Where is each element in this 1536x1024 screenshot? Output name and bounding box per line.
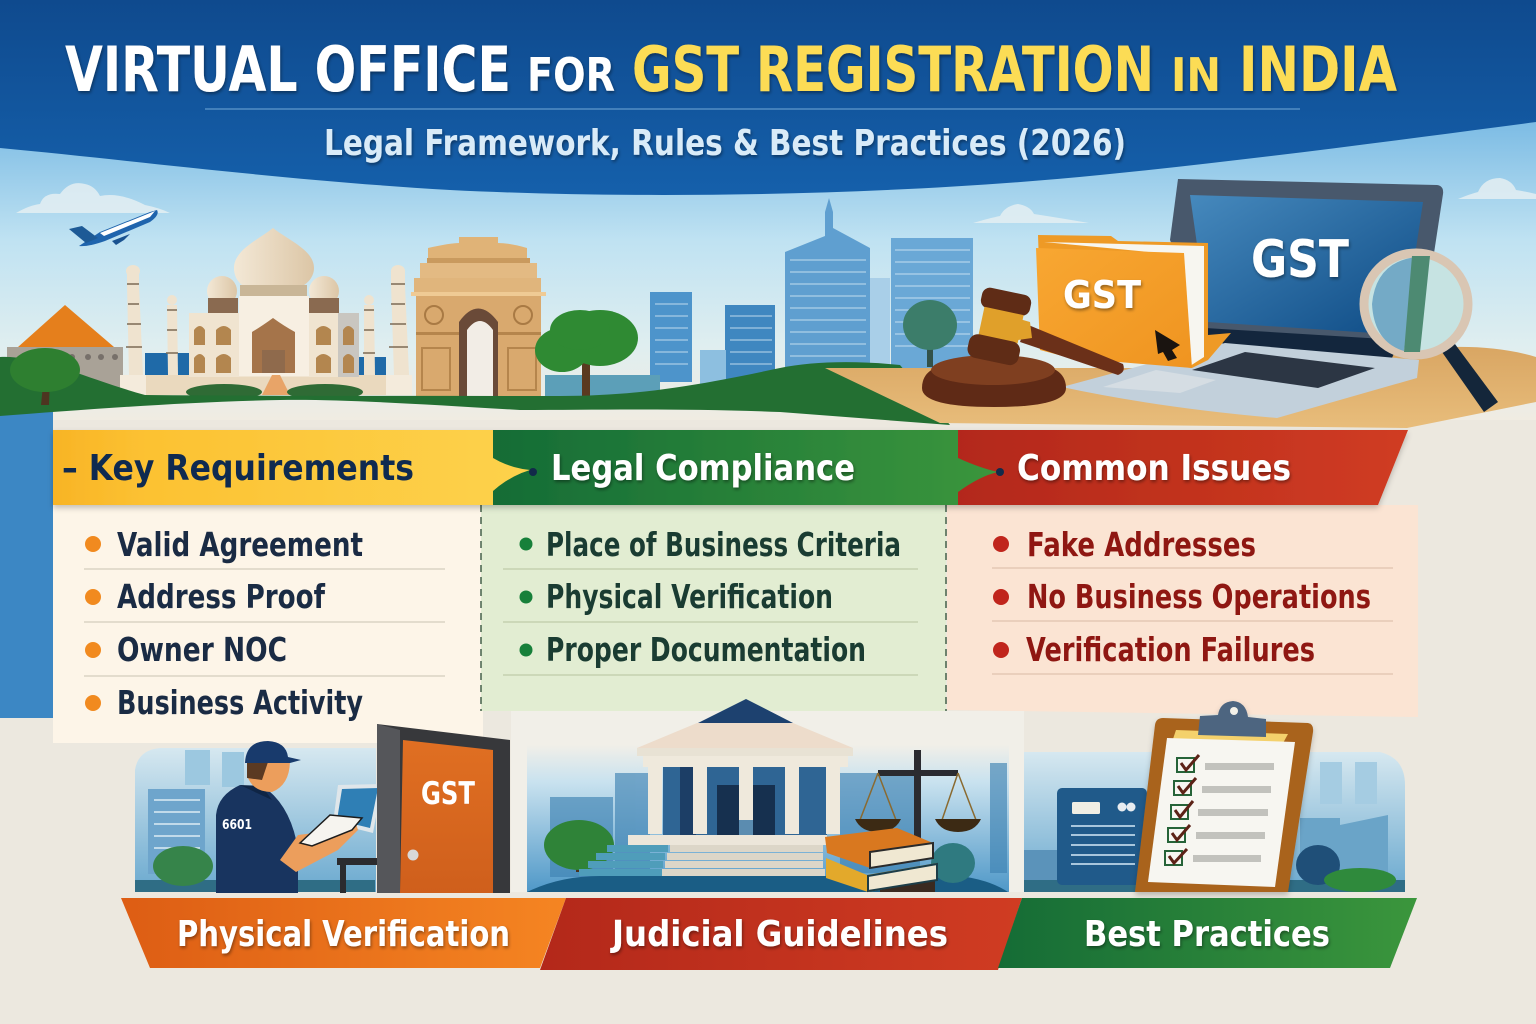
- list items: Place of Business Criteria: [546, 525, 901, 564]
- scene background: [1024, 752, 1405, 892]
- scene buildings: [1024, 762, 1405, 892]
- panel: key requirements: [53, 503, 483, 743]
- landmark: hill fort: [7, 305, 123, 395]
- heading bars: [53, 430, 1408, 505]
- subtitle: Legal Framework, Rules & Best Practices (2026): [324, 123, 1126, 164]
- panel: judicial guidelines: [527, 699, 1022, 970]
- icon: magnifying glass: [1364, 253, 1498, 412]
- tree: [1296, 845, 1396, 892]
- list items: Physical Verification: [546, 577, 833, 616]
- heading bar: key requirements: [53, 430, 530, 505]
- ribbon label: Physical Verification: [177, 914, 510, 955]
- icon: inspector: 6601: [222, 818, 252, 833]
- header band: [0, 0, 1536, 195]
- scene background: [527, 745, 1009, 892]
- title: [65, 33, 1397, 106]
- icon: ID card: [1057, 788, 1147, 885]
- panel: best practices: [998, 701, 1417, 968]
- list items: [992, 525, 1393, 674]
- icon: courthouse: [579, 699, 853, 876]
- list items: Owner NOC: [117, 630, 287, 669]
- connector dots: [529, 468, 1004, 476]
- title: FOR: [527, 48, 615, 102]
- icon: clipboard checklist: [1135, 701, 1313, 892]
- title underline: [205, 108, 1300, 110]
- heading: common issues: Common Issues: [1017, 448, 1291, 489]
- tree: [535, 310, 638, 397]
- icon: airplane: [69, 210, 158, 246]
- icon: laptop: [1062, 179, 1443, 418]
- list items: Fake Addresses: [1027, 525, 1256, 564]
- landmark: Taj Mahal: [120, 228, 412, 400]
- heading: key requirements: – Key Requirements: [62, 448, 414, 489]
- panel body: [947, 505, 1418, 717]
- icon: GST door: [377, 724, 510, 893]
- white backdrop behind judicial scene: [511, 711, 1024, 892]
- heading: legal compliance: Legal Compliance: [551, 448, 855, 489]
- icon: laptop: GST: [1251, 230, 1349, 290]
- tree: [544, 820, 614, 872]
- ribbon: [121, 898, 566, 968]
- tree: [903, 300, 957, 367]
- left blue strip: [0, 412, 53, 718]
- panel body: [53, 503, 483, 743]
- panel body: [481, 505, 946, 711]
- skyline: distant city: [545, 198, 973, 397]
- scene buildings: [550, 763, 1007, 877]
- icon: books: [825, 828, 937, 892]
- icon: GST door: GST: [421, 776, 475, 812]
- ribbon label: Best Practices: [1084, 914, 1330, 955]
- ground: [0, 357, 950, 425]
- panel: common issues: [947, 505, 1418, 717]
- panel: legal compliance: [481, 505, 946, 711]
- title: IN: [1171, 48, 1221, 102]
- ribbon: [540, 898, 1022, 970]
- desk: [825, 347, 1536, 428]
- list items: [503, 525, 918, 675]
- list items: Valid Agreement: [117, 525, 363, 564]
- heading bar: common issues: [958, 430, 1408, 505]
- title: GST REGISTRATION: [632, 33, 1154, 106]
- scene buildings: [135, 750, 375, 892]
- list items: Proper Documentation: [546, 630, 866, 669]
- skyline background sky: [0, 120, 1536, 420]
- icon: scales: [855, 750, 981, 840]
- landmark: India Gate: [411, 237, 546, 397]
- scene background: [135, 748, 376, 892]
- list items: [84, 525, 445, 722]
- title: VIRTUAL OFFICE: [65, 33, 511, 106]
- title: INDIA: [1239, 33, 1397, 106]
- icon: gavel: [922, 286, 1124, 407]
- list items: Verification Failures: [1026, 630, 1315, 669]
- list items: Business Activity: [117, 683, 363, 722]
- list items: No Business Operations: [1027, 577, 1371, 616]
- icon: GST folder: GST: [1063, 273, 1141, 317]
- ribbon label: Judicial Guidelines: [609, 914, 948, 955]
- heading bar: legal compliance: [493, 430, 998, 505]
- clouds: [16, 178, 1536, 223]
- ribbon: [998, 898, 1417, 968]
- tree: [931, 843, 975, 883]
- icon: inspector: [216, 741, 397, 893]
- list items: Address Proof: [117, 577, 326, 616]
- tree: [153, 846, 213, 886]
- panel: physical verification: [121, 724, 566, 968]
- icon: GST folder: [1036, 235, 1231, 368]
- ground: [527, 876, 1008, 892]
- tree: [10, 348, 80, 405]
